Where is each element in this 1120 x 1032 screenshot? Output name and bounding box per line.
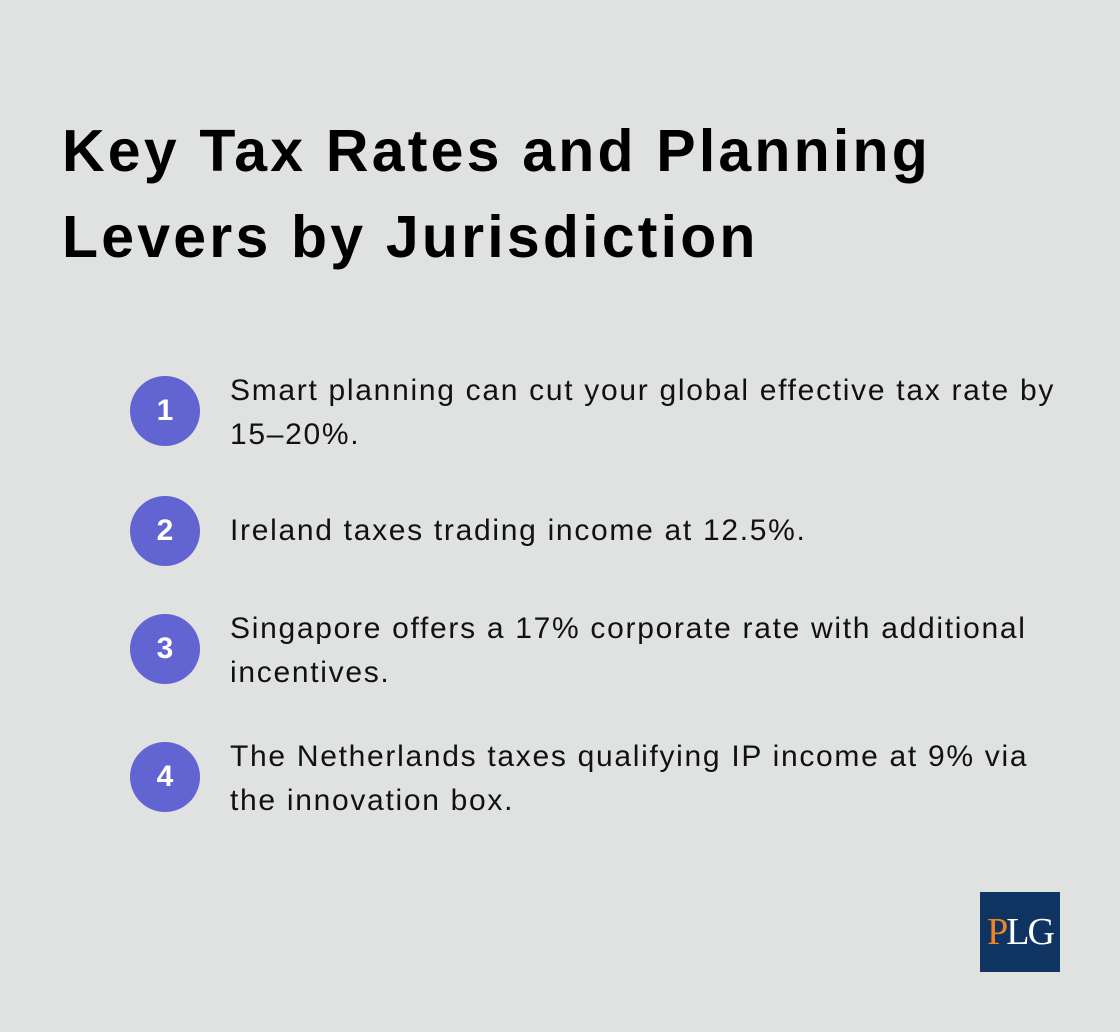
badge 4: 4 xyxy=(157,760,173,793)
badge 1 xyxy=(130,376,200,446)
title: Levers by Jurisdiction xyxy=(62,204,759,270)
item 3 xyxy=(130,612,1027,689)
text 3: Singapore offers a 17% corporate rate with additional incentives. xyxy=(230,612,1027,689)
badge 4 xyxy=(130,742,200,812)
logo: PLG xyxy=(987,911,1053,953)
logo xyxy=(980,892,1060,972)
badge 2: 2 xyxy=(157,514,173,547)
text 1: Smart planning can cut your global effective tax rate by 15–20%. xyxy=(230,374,1055,451)
title xyxy=(62,118,931,270)
item 2 xyxy=(130,496,807,566)
badge 3 xyxy=(130,614,200,684)
text 4: The Netherlands taxes qualifying IP income at 9% via the innovation box. xyxy=(230,740,1028,817)
badge 2 xyxy=(130,496,200,566)
badge 3: 3 xyxy=(157,632,173,665)
text 2: Ireland taxes trading income at 12.5%. xyxy=(230,514,807,547)
item 4 xyxy=(130,740,1028,817)
item 1 xyxy=(130,374,1055,451)
badge 1: 1 xyxy=(157,394,173,427)
title: Key Tax Rates and Planning xyxy=(62,118,931,184)
